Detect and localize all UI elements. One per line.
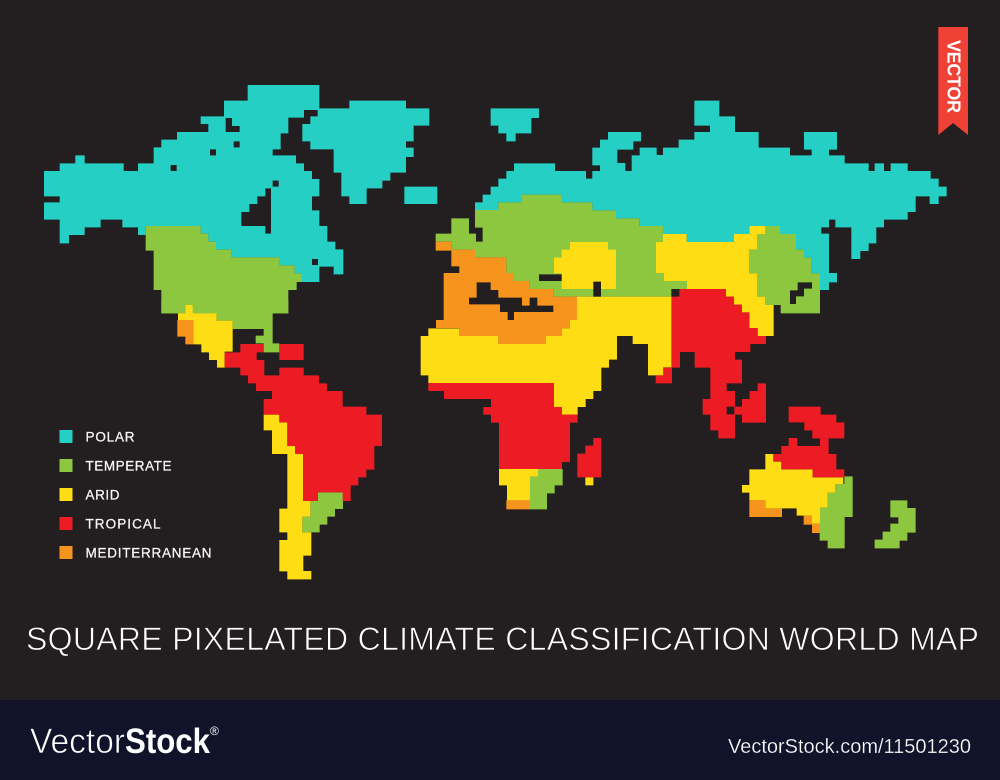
temperate climate regions [146,195,916,548]
legend item: arid: ARID [86,488,120,502]
world map [44,85,947,579]
arid climate regions [178,226,843,579]
title: SQUARE PIXELATED CLIMATE CLASSIFICATION WORLD MAP [26,621,979,657]
footer logo: VectorStock [30,722,220,761]
legend item: temperate: TEMPERATE [86,458,172,474]
legend item: arid [60,488,120,502]
tropical climate regions [225,289,844,501]
legend item: mediterranean: MEDITERRANEAN [86,546,212,560]
ribbon: vector [938,27,968,135]
inland seas and lakes [171,118,812,414]
legend item: polar: POLAR [86,430,135,444]
footer logo: ® [210,724,219,738]
footer bar [0,700,1000,780]
mediterranean climate regions [177,242,820,533]
polar climate regions [44,85,947,290]
ribbon: vector: VECTOR [944,40,964,113]
legend item: tropical: TROPICAL [86,516,161,532]
legend item: polar [60,430,135,444]
footer image id: VectorStock.com/11501230 [728,736,971,758]
legend [60,430,212,560]
